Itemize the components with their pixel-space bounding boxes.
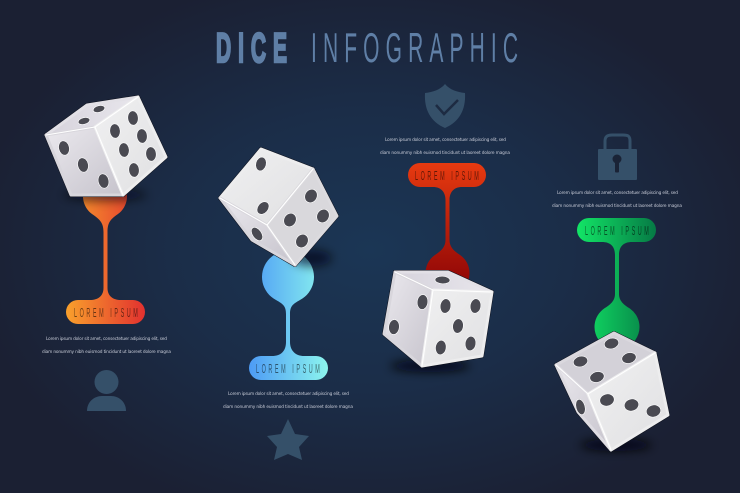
orange caption: diam nonummy nibh euismod tincidunt ut laoreet dolore magna	[42, 349, 171, 355]
panel: blue step	[220, 149, 353, 460]
icon: padlock	[598, 135, 637, 180]
orange caption	[42, 336, 171, 355]
green caption	[552, 190, 682, 209]
orange drop connector	[66, 174, 145, 324]
panel: red step	[380, 84, 510, 372]
red label: LOREM IPSUM	[415, 170, 479, 184]
die shadow	[292, 250, 332, 266]
blue caption: diam nonummy nibh euismod tincidunt ut laoreet dolore magna	[223, 404, 353, 410]
red caption	[380, 137, 510, 156]
green caption: diam nonummy nibh euismod tincidunt ut laoreet dolore magna	[552, 203, 682, 209]
green caption: Lorem ipsum dolor sit amet, consectetuer adipiscing elit, sed	[557, 190, 678, 196]
title	[216, 25, 518, 72]
title: INFOGRAPHIC	[311, 25, 518, 72]
die shadow	[580, 439, 652, 451]
die four	[556, 333, 668, 450]
die three	[384, 272, 492, 366]
panel: orange step	[42, 97, 171, 411]
green label: LOREM IPSUM	[585, 225, 649, 239]
green drop connector	[577, 218, 656, 349]
die shadow	[63, 189, 147, 201]
title: DICE	[216, 25, 287, 72]
orange label: LOREM IPSUM	[74, 307, 138, 321]
panel: green step	[552, 135, 682, 451]
orange caption: Lorem ipsum dolor sit amet, consectetuer adipiscing elit, sed	[46, 336, 167, 342]
icon: person	[87, 370, 126, 411]
blue caption: Lorem ipsum dolor sit amet, consectetuer adipiscing elit, sed	[228, 391, 349, 397]
blue label: LOREM IPSUM	[256, 363, 320, 377]
red caption: Lorem ipsum dolor sit amet, consectetuer adipiscing elit, sed	[385, 137, 506, 143]
red caption: diam nonummy nibh euismod tincidunt ut laoreet dolore magna	[380, 150, 510, 156]
die shadow	[390, 360, 470, 372]
icon: shield with check	[425, 84, 465, 128]
die two	[220, 149, 337, 265]
blue drop connector	[249, 251, 328, 380]
icon: star	[267, 419, 309, 460]
die one	[46, 97, 166, 195]
red drop connector	[408, 163, 486, 295]
blue caption	[223, 391, 353, 410]
